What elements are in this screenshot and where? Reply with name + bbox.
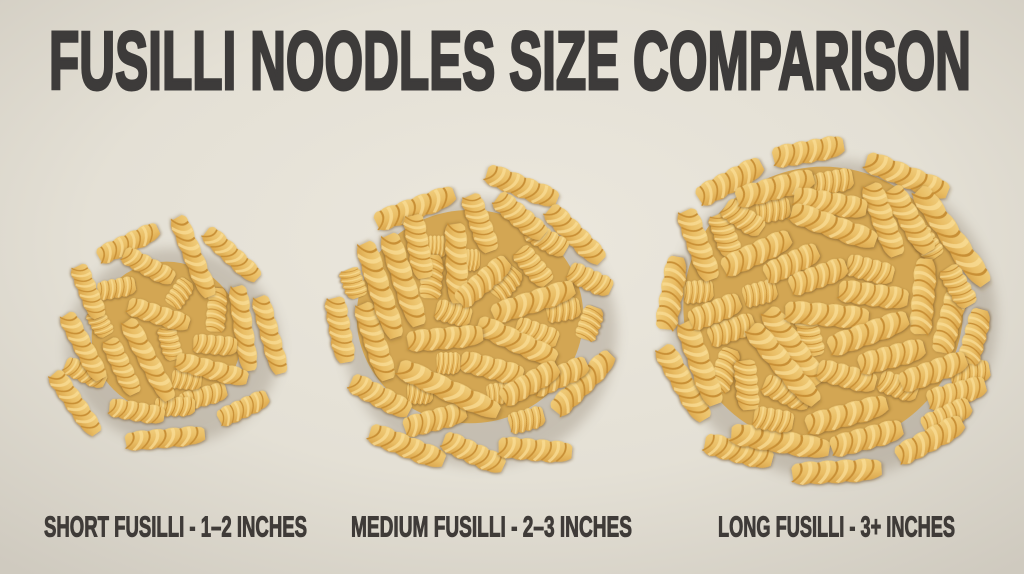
label: medium fusilli: MEDIUM FUSILLI - 2–3 INCHES xyxy=(351,512,632,544)
pile: short fusilli xyxy=(46,213,290,452)
label: short fusilli: SHORT FUSILLI - 1–2 INCHES xyxy=(44,512,307,544)
pile: medium fusilli xyxy=(323,162,620,477)
pile: long fusilli xyxy=(652,134,997,486)
